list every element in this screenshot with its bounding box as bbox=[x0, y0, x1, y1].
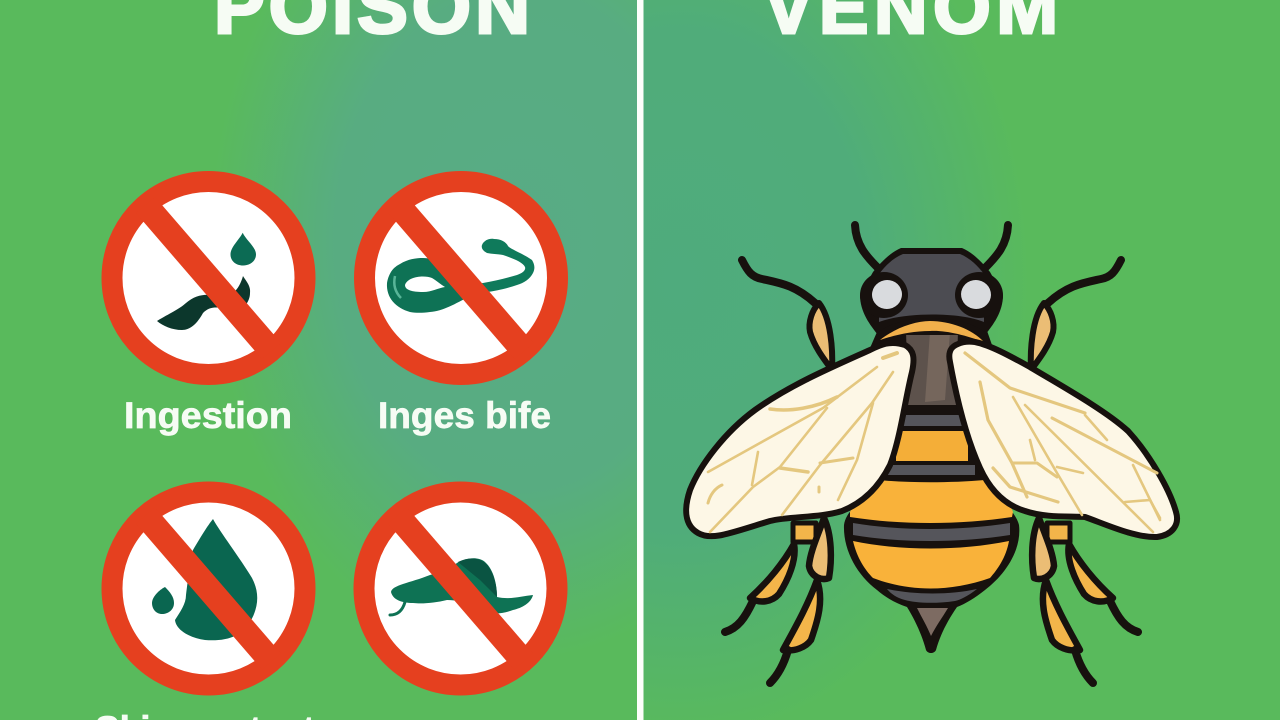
panel: poison bbox=[95, 0, 558, 720]
label: Ingestion: Ingestion bbox=[124, 395, 292, 436]
bee legs bbox=[725, 225, 1138, 683]
prohibition icon: ingestion bbox=[112, 182, 305, 374]
bee left wing bbox=[686, 343, 914, 536]
bee head bbox=[860, 248, 1003, 342]
centre divider bbox=[637, 0, 644, 720]
bee thorax bbox=[870, 325, 992, 405]
prohibition icon: water drops bbox=[112, 492, 305, 685]
panel: venom bbox=[686, 0, 1177, 683]
bee right wing bbox=[949, 342, 1177, 537]
prohibition icon: leaf bbox=[364, 492, 557, 685]
label: Inges bife: Inges bife bbox=[378, 395, 551, 436]
bee abdomen bbox=[844, 400, 1019, 653]
prohibition icon: snake bbox=[364, 182, 558, 374]
illustration: bee bbox=[686, 225, 1177, 683]
